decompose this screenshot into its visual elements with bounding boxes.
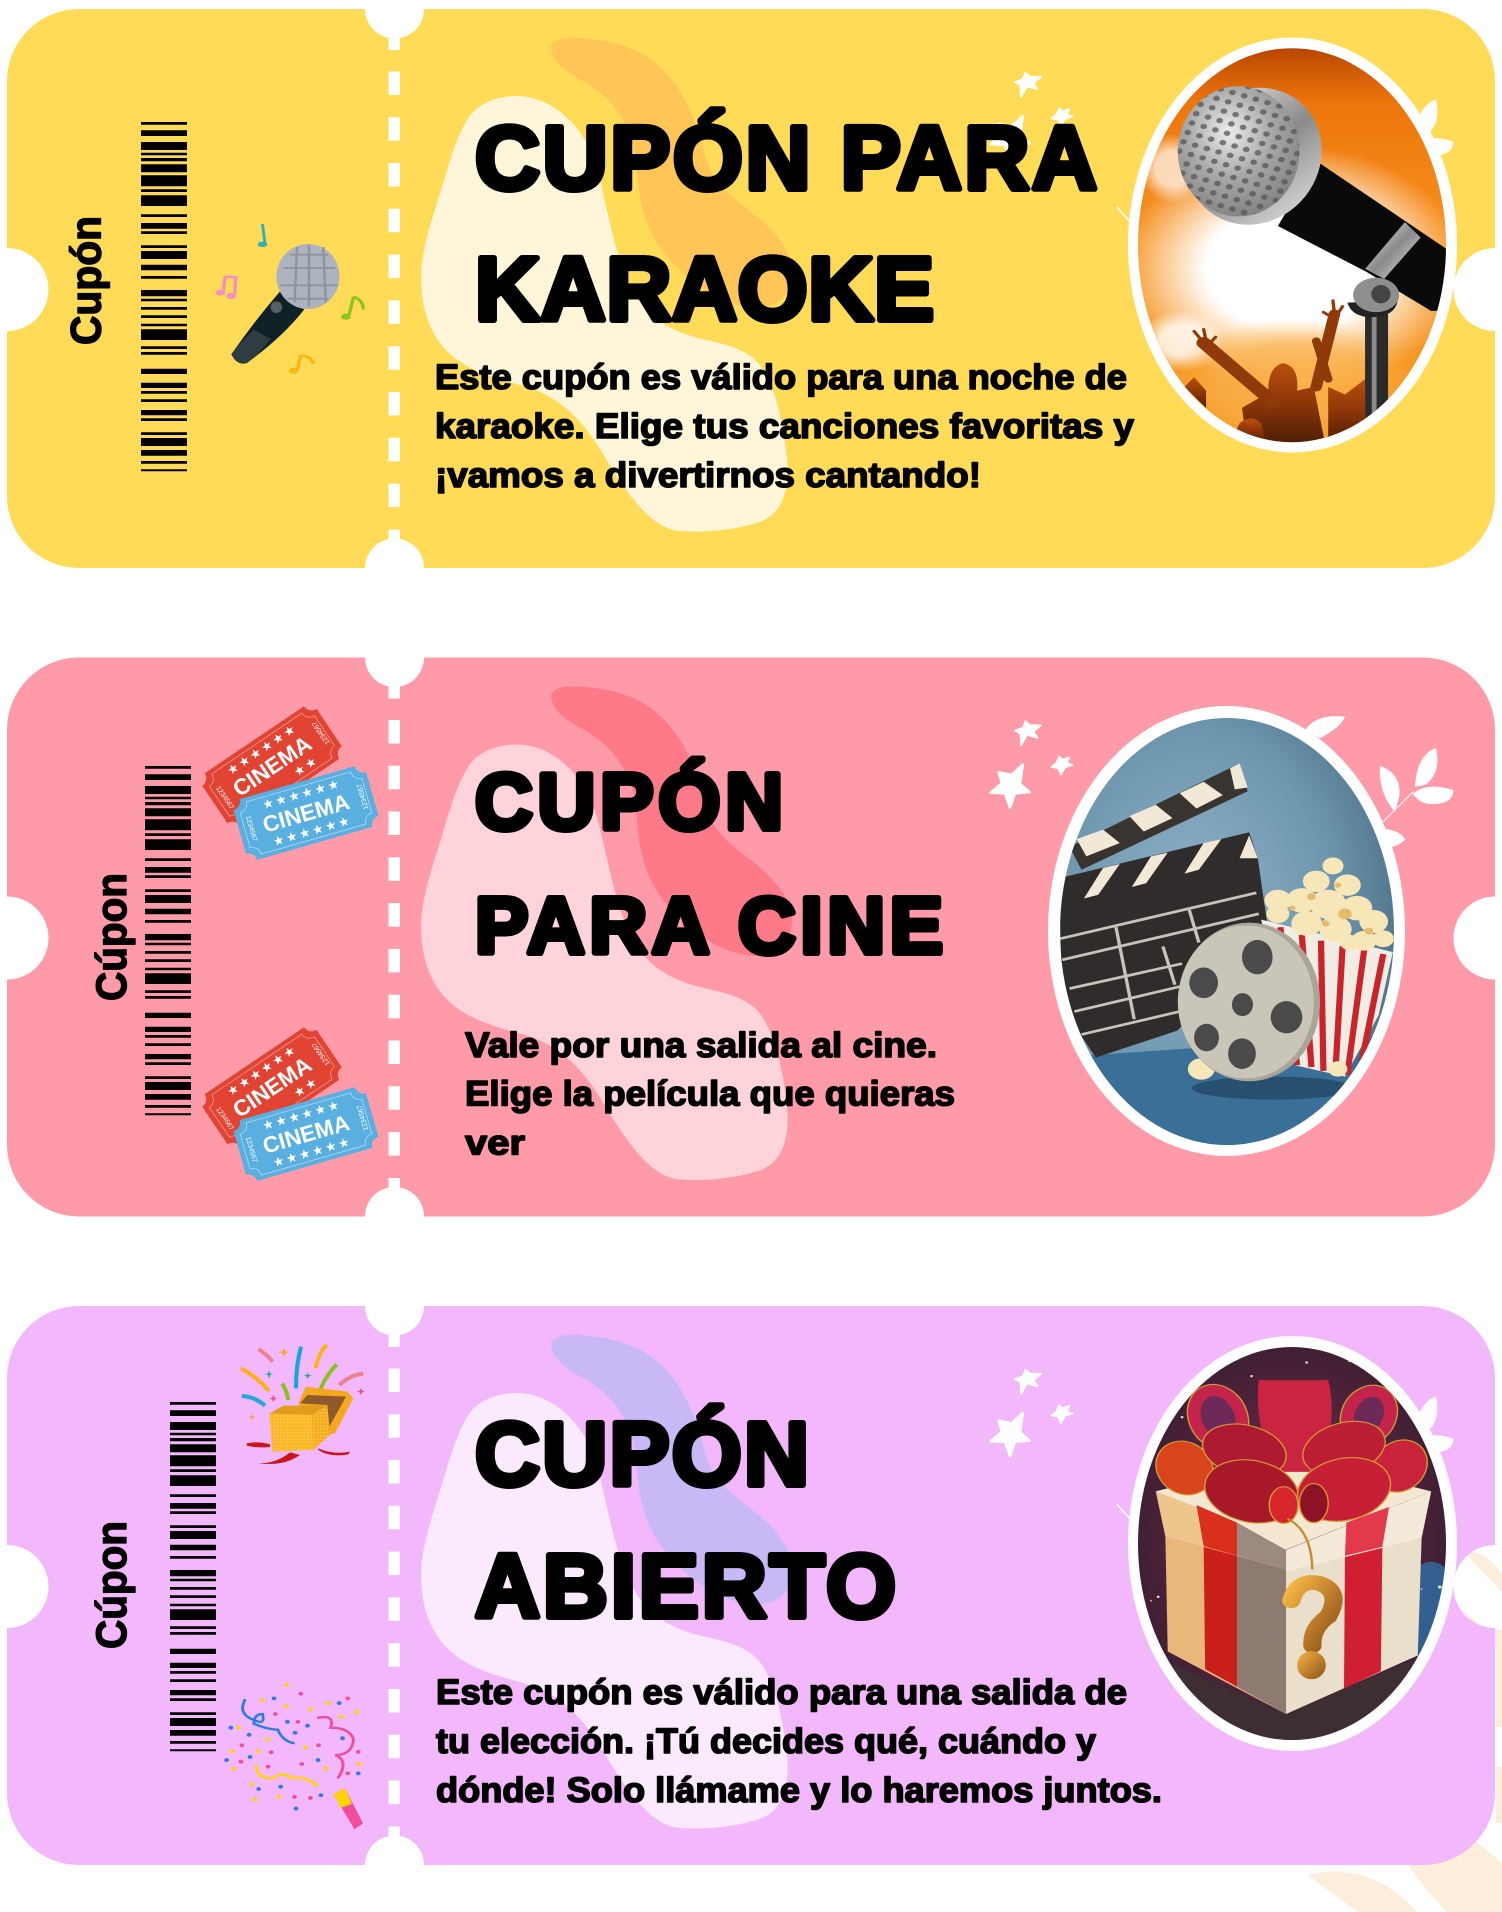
description [465, 1026, 955, 1162]
icon: cinema tickets bottom: CINEMA [228, 1052, 316, 1123]
title: CUPÓN [475, 1404, 809, 1505]
icon: cinema tickets top: 1234567 [214, 785, 235, 811]
decoration: cream leaves behind coupon [1307, 1550, 1502, 1912]
description: karaoke. Elige tus canciones favoritas y [435, 407, 1135, 446]
panel: cinema coupon [7, 658, 1495, 1216]
icon: microphone with notes [216, 224, 363, 374]
dark blob [551, 38, 792, 307]
perforation line [388, 686, 400, 1190]
title: ABIERTO [475, 1537, 896, 1637]
barcode [141, 122, 187, 471]
icon: cinema tickets bottom: 1234567 [244, 1136, 258, 1164]
stars and leaves [991, 716, 1453, 870]
description: Este cupón es válido para una noche de [435, 358, 1127, 397]
stars and leaves [991, 68, 1453, 222]
light blob [421, 1393, 788, 1829]
barcode [145, 766, 191, 1115]
photo: clapperboard, film reel and popcorn [1058, 718, 1395, 1146]
description: dónde! Solo llámame y lo haremos juntos. [436, 1771, 1162, 1810]
ticket background [7, 9, 1495, 568]
photo: stage microphone and crowd [1138, 48, 1446, 442]
vertical label: Cúpon [88, 1521, 136, 1649]
photo frame [1128, 38, 1457, 452]
title [475, 757, 943, 970]
description [436, 1673, 1162, 1810]
icon: cinema tickets top: 1234567 [311, 720, 332, 746]
icon: cinema tickets bottom: CINEMA [260, 1110, 352, 1159]
description: Este cupón es válido para una salida de [436, 1673, 1127, 1712]
vertical label: Cúpon [88, 873, 136, 1001]
icon: party popper and confetti [224, 1683, 363, 1829]
title [475, 1404, 896, 1637]
photo frame [1048, 706, 1405, 1156]
icon: cinema tickets bottom [197, 1022, 381, 1183]
icon: cinema tickets top: 1234567 [356, 783, 370, 810]
title: CUPÓN PARA [475, 108, 1097, 209]
icon: open gift box with streamers [241, 1345, 365, 1464]
dark blob [551, 1335, 792, 1604]
title: KARAOKE [475, 240, 934, 340]
icon: cinema tickets bottom: 1234567 [311, 1041, 332, 1067]
icon: cinema tickets top [197, 701, 381, 862]
light blob [421, 96, 788, 532]
vertical label: Cupón [62, 216, 110, 345]
title [475, 108, 1097, 340]
stars and leaves [991, 1365, 1453, 1519]
panel: karaoke coupon [7, 9, 1495, 568]
photo frame [1128, 1336, 1457, 1751]
description [435, 358, 1135, 495]
photo: gift box with question mark [1134, 1347, 1460, 1745]
description: ver [465, 1124, 525, 1162]
barcode [170, 1402, 216, 1751]
icon: cinema tickets top: CINEMA [260, 789, 352, 838]
light blob [421, 744, 788, 1180]
title: PARA CINE [475, 881, 943, 970]
title: CUPÓN [475, 757, 783, 846]
icon: cinema tickets bottom: 1234567 [356, 1104, 370, 1131]
dark blob [551, 686, 792, 956]
ticket background [7, 1306, 1495, 1865]
ticket background [7, 658, 1495, 1216]
panel: open coupon [7, 1306, 1495, 1865]
description: tu elección. ¡Tú decides qué, cuándo y [436, 1722, 1097, 1761]
perforation line [388, 38, 400, 542]
icon: cinema tickets top: 1234567 [244, 815, 258, 843]
description: Elige la película que quieras [465, 1074, 955, 1114]
description: Vale por una salida al cine. [465, 1026, 937, 1065]
perforation line [388, 1335, 400, 1839]
icon: cinema tickets top: CINEMA [228, 731, 316, 802]
description: ¡vamos a divertirnos cantando! [435, 456, 981, 495]
icon: cinema tickets bottom: 1234567 [214, 1106, 235, 1132]
